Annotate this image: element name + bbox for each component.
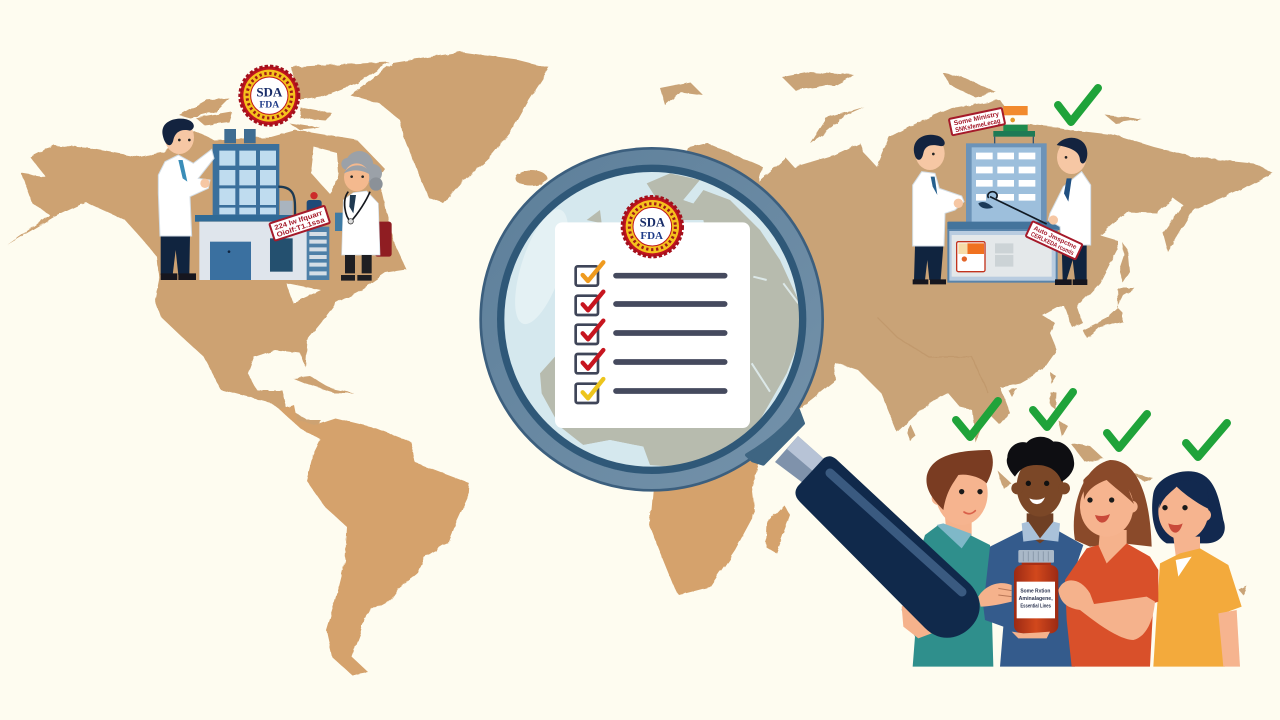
- scene: North American inspection: [158, 66, 392, 281]
- person: orange shirt: [1058, 460, 1158, 667]
- magnifying glass: [481, 148, 823, 490]
- magnifying glass handle: [775, 436, 980, 638]
- inspection tool: [978, 192, 1047, 224]
- checklist lines: [616, 276, 725, 391]
- stamp lower: Auto Jmspctne: [1032, 225, 1078, 251]
- seal: SDA FDA: FDA: [259, 100, 279, 111]
- check marks: [583, 262, 603, 398]
- lens collar: [747, 410, 803, 464]
- map: Eurasia: [650, 100, 1273, 443]
- check marks above people: [956, 392, 1227, 457]
- doctor left: [158, 119, 214, 280]
- checklist paper: [555, 222, 750, 428]
- group of people with medicine: [902, 437, 1242, 667]
- lens glass: [503, 171, 800, 468]
- medicine bottle: [1012, 550, 1058, 638]
- seal: SDA FDA: SDA: [256, 85, 283, 100]
- lens ring: [489, 156, 815, 482]
- doctor left: [913, 135, 964, 284]
- medicine bottle: Aminalagene,: [1019, 596, 1053, 602]
- stamp lower: [1026, 221, 1083, 260]
- medicine bottle: Essential Lines: [1020, 603, 1051, 609]
- medicine bottle: Some Rxtion: [1020, 589, 1050, 595]
- seal: SDA FDA: FDA: [640, 230, 663, 242]
- map: Baja gulf: [182, 345, 198, 372]
- map: Japan: [1083, 288, 1135, 338]
- doctor right: [1048, 138, 1091, 285]
- building: [947, 137, 1060, 282]
- map: Madagascar: [766, 505, 790, 553]
- map: Iceland: [515, 170, 547, 186]
- stamp: Oiolf:T1.1ssa: [276, 217, 326, 239]
- map: Arctic islands: [179, 62, 389, 130]
- person: yellow shirt: [1152, 471, 1242, 667]
- map: northern islets: [660, 72, 1142, 123]
- map: North America: [7, 130, 407, 433]
- person: blue shirt: [983, 437, 1083, 667]
- checkboxes: [576, 266, 598, 403]
- map: Greenland: [350, 52, 550, 203]
- hand on bottle: [978, 583, 1012, 607]
- magnified land: [540, 173, 803, 468]
- person: teal shirt: [902, 450, 993, 667]
- stamp: 224 lw Ifquarr: [274, 210, 324, 232]
- building: [195, 129, 329, 280]
- stamp top: Some Ministry: [953, 111, 1000, 127]
- map: Caribbean: [293, 376, 354, 393]
- seal: SDA FDA: [622, 197, 682, 257]
- map: Southeast Asian islands: [907, 372, 1247, 595]
- map: South America: [280, 405, 469, 675]
- stamp top: [949, 108, 1005, 135]
- seal: SDA FDA: SDA: [640, 215, 666, 229]
- map: Great Lakes: [286, 283, 321, 303]
- stamp: [269, 206, 330, 241]
- stamp lower: CERLKEDA rcomls: [1030, 231, 1075, 257]
- map: Himalaya ridges: [877, 317, 988, 393]
- seal: SDA FDA: [240, 66, 299, 125]
- scene: Asian inspection: [913, 106, 1091, 285]
- map: Sakhalin: [1119, 242, 1130, 283]
- flag: [993, 106, 1035, 137]
- stamp top: SNKsfemeLecag: [955, 118, 1001, 134]
- doctor right: [335, 151, 392, 281]
- map: Africa: [650, 440, 759, 595]
- map: Novaya Zemlya: [810, 107, 864, 143]
- check mark top right: [1058, 88, 1098, 122]
- map: Hudson Bay: [311, 147, 339, 193]
